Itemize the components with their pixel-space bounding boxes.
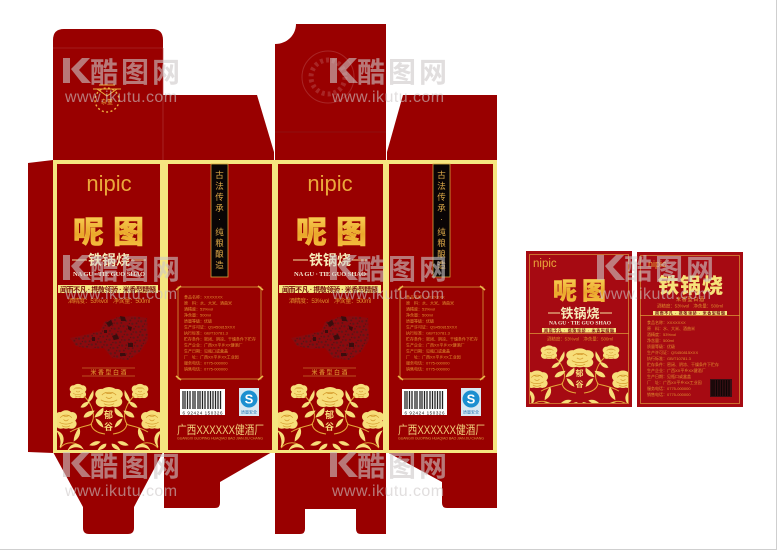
black strip: vertical slogan [211, 164, 228, 277]
info box: 生产日期：见瓶口或盒盖 [184, 348, 228, 354]
panel: back B [389, 164, 493, 450]
info box: 生产许可证：QS450815XXX [184, 324, 235, 330]
spec line: 酒精度：53%vol 净含量：500ml [547, 336, 613, 342]
factory name: 广西XXXXXX健酒厂 [398, 423, 485, 437]
black strip: vertical slogan: · [218, 214, 221, 224]
black strip: vertical slogan: 造 [437, 260, 446, 270]
factory name: 广西XXXXXX健酒厂 [177, 423, 264, 437]
black strip: vertical slogan: · [440, 214, 443, 224]
factory pinyin: GUANGXI GUOPING HUAQIAO BAO JIAN JIU CHANG [177, 436, 263, 440]
brand: nipic: nipic [307, 171, 353, 196]
info box: 食品名称：XXXXXXX [406, 294, 445, 300]
spec line: 酒精度：53%vol 净含量：500ml [289, 297, 371, 305]
black strip: vertical slogan: 纯 [215, 227, 224, 237]
black strip: vertical slogan: 纯 [437, 227, 446, 237]
barcode [402, 389, 447, 416]
watermark: row 2 right: www.ikutu.com [598, 286, 712, 303]
watermark: row 3 middle [330, 451, 447, 500]
black strip: vertical slogan: 酿 [215, 249, 224, 259]
watermark: row 2 left: www.ikutu.com [64, 286, 178, 303]
info box [398, 286, 485, 380]
info box: 销售电话：0775-000000 [184, 366, 228, 372]
watermark: row 1 middle [330, 57, 447, 106]
info box: 净含量：500ml [184, 312, 211, 318]
pinyin line: NA GU · TIE GUO SHAO [549, 320, 612, 326]
black strip: vertical slogan: 酿 [437, 249, 446, 259]
illustration: gold peonies [276, 384, 384, 450]
panel content: front A [55, 171, 163, 450]
info box: 生产日期：见瓶口或盒盖 [406, 348, 450, 354]
brand: nipic: nipic [86, 171, 132, 196]
info text: 生产许可证：QS450815XXX [647, 349, 698, 355]
black strip: vertical slogan: 粮 [437, 238, 446, 248]
brand: nipic: nipic [648, 259, 667, 269]
info box: 质量等级：优级 [184, 318, 212, 324]
black strip: vertical slogan: 承 [215, 203, 224, 213]
subtitle: 铁锅烧 [293, 252, 367, 266]
pinyin line: NA GU · TIE GUO SHAO [294, 271, 366, 278]
tag: 米香型白酒: 米香型白酒 [90, 368, 126, 376]
watermark: row 2 middle [330, 254, 447, 303]
heading: 呢图: 呢图 [296, 215, 367, 250]
info text: 酒精度：53%vol [647, 331, 676, 337]
tag: 米香型白酒 [303, 368, 356, 376]
emblem: lid seal [93, 85, 121, 112]
barcode: 6 92424 150326 [404, 410, 445, 416]
info box: 生产许可证：QS450815XXX [406, 324, 457, 330]
illustration: gold peonies: 谷 [325, 421, 334, 432]
box dieline [28, 24, 497, 534]
panel: back A [168, 164, 272, 450]
label: front [526, 251, 634, 408]
info box [176, 286, 263, 380]
strip: slogan: 闻而不凡 · 携敬领骄 · 米香型精髓 [655, 310, 725, 316]
barcode: 6 92424 150326 [182, 410, 223, 416]
pinyin line: NA GU · TIE GUO SHAO [73, 271, 145, 278]
tag: 米香型白酒: 米香型白酒 [312, 368, 348, 376]
flap: bottom third with notch [275, 452, 386, 534]
strip: slogan: 闻而不凡 · 携敬领骄 · 米香型精髓 [60, 285, 156, 294]
panel content: front B [276, 171, 384, 450]
watermark: row 3 left [63, 451, 180, 500]
watermark: row 2 right: 酷图网 [624, 254, 714, 285]
heading: 铁锅烧: 铁锅烧 [658, 275, 723, 298]
info text: 贮存条件：密闭、阴凉、干燥条件下贮存 [647, 361, 719, 367]
brand: nipic: nipic [533, 258, 557, 270]
panel: front A [57, 164, 160, 450]
info box: 厂 址：广西XX平乡XX工业园 [406, 354, 461, 360]
image: dark hotpot illustration [291, 316, 369, 360]
info box: 服务电话：0775-000000 [406, 360, 450, 366]
info text: 质量等级：优级 [647, 343, 675, 349]
QS mark [461, 388, 481, 416]
info box: 厂 址：广西XX平乡XX工业园 [184, 354, 239, 360]
heading: 呢图: 呢图 [73, 215, 144, 250]
black strip: vertical slogan [433, 164, 450, 277]
spec line: 酒精度：53%vol 净含量：500ml [657, 302, 723, 310]
panel content: back A [176, 164, 264, 440]
black strip: vertical slogan: 古 [215, 170, 224, 180]
QS mark: S [467, 392, 476, 406]
black strip: vertical slogan: 古 [437, 170, 446, 180]
barcode [180, 389, 225, 416]
flap: bottom fourth [387, 452, 497, 508]
info box: 贮存条件：密闭、阴凉、干燥条件下贮存 [406, 336, 478, 342]
illustration: gold peonies: 郁 [104, 409, 113, 420]
black strip: vertical slogan: 传 [215, 192, 224, 202]
black strip: vertical slogan: 粮 [215, 238, 224, 248]
QS mark: 质量安全 [463, 408, 479, 414]
info text [647, 319, 719, 397]
label: back [637, 252, 743, 407]
info box: 食品名称：XXXXXXX [184, 294, 223, 300]
emblem: lid seal: 杂董 [101, 98, 113, 106]
emblem: faint ring on flap [302, 51, 354, 103]
flap: top left lid [53, 29, 163, 160]
subtitle: 铁锅烧: 铁锅烧 [88, 252, 130, 268]
watermark: row 3 left: www.ikutu.com [64, 483, 178, 500]
strip: slogan [58, 285, 158, 293]
info box: 净含量：500ml [406, 312, 433, 318]
flap: bottom second [164, 452, 272, 508]
flap: top fourth [387, 95, 497, 160]
QS mark [239, 388, 259, 416]
illustration: gold peonies: 郁 [576, 368, 584, 378]
black strip: vertical slogan: 法 [437, 181, 446, 191]
strip: slogan: 闻而不凡 · 携敬领骄 · 米香型精髓 [282, 285, 378, 294]
subtitle: 铁锅烧: 铁锅烧 [560, 306, 600, 321]
info box: 执行标准：GB/T10781.3 [406, 330, 451, 336]
flap: top third with notch [275, 24, 386, 160]
panel: front B [278, 164, 383, 450]
watermark: row 2 middle: 酷图网 [357, 254, 447, 285]
barcode [710, 379, 732, 397]
flap: left side glue tab [28, 160, 53, 453]
watermark: row 1 left: 酷图网 [90, 57, 180, 88]
black strip: vertical slogan: 法 [215, 181, 224, 191]
watermark: row 1 middle: 酷图网 [357, 57, 447, 88]
tag: 米香型白酒 [82, 368, 135, 376]
watermark: row 1 left [63, 57, 180, 106]
info box: 销售电话：0775-000000 [406, 366, 450, 372]
flap: bottom first [53, 452, 163, 534]
black strip: vertical slogan: 造 [215, 260, 224, 270]
info box: 贮存条件：密闭、阴凉、干燥条件下贮存 [184, 336, 256, 342]
info box: 原 料：水、大米、酒曲米 [406, 300, 454, 306]
info text: 厂 址：广西XX平乡XX工业园 [647, 379, 702, 385]
strip: slogan [279, 285, 381, 293]
info text: 销售电话：0775-000000 [647, 391, 691, 397]
QS mark: S [245, 392, 254, 406]
black strip: vertical slogan: 承 [437, 203, 446, 213]
strip: slogan: 闻而不凡 · 携敬领骄 · 米香型精髓 [544, 327, 614, 333]
info text: 服务电话：0775-000000 [647, 385, 691, 391]
watermark: row 3 middle: 酷图网 [357, 451, 447, 482]
flap: top second [163, 95, 274, 160]
subtitle: 铁锅烧 [72, 252, 146, 266]
watermark: row 3 middle: www.ikutu.com [331, 483, 445, 500]
watermark: row 1 left: www.ikutu.com [64, 89, 178, 106]
info box: 执行标准：GB/T10781.3 [184, 330, 229, 336]
illustration: gold peonies: 郁 [325, 409, 334, 420]
illustration: gold peonies [55, 384, 163, 450]
illustration: gold peonies: 谷 [104, 421, 113, 432]
info text: 执行标准：GB/T10781.3 [647, 355, 692, 361]
heading: 呢图: 呢图 [553, 278, 606, 305]
spec line: 酒精度：53%vol 净含量：500ml [68, 297, 150, 305]
yellow frame [53, 160, 497, 453]
info text: 生产日期：见瓶口或盒盖 [647, 373, 691, 379]
info box: 生产企业：广西XX平乡XX健酒厂 [406, 342, 465, 348]
info text: 净含量：500ml [647, 337, 674, 343]
image: dark hotpot illustration [70, 316, 148, 360]
QS mark: 质量安全 [241, 408, 257, 414]
watermark: row 1 middle: www.ikutu.com [331, 89, 445, 106]
watermark: row 2 left [63, 254, 180, 303]
illustration: gold peonies [530, 345, 628, 403]
info box: 原 料：水、大米、酒曲米 [184, 300, 232, 306]
info text: 食品名称：XXXXXXX [647, 319, 686, 325]
black strip: vertical slogan: 传 [437, 192, 446, 202]
watermark: row 2 middle: www.ikutu.com [331, 286, 445, 303]
watermark: row 2 right [597, 254, 714, 303]
info box: 酒精度：53%vol [184, 306, 213, 312]
info box: 生产企业：广西XX平乡XX健酒厂 [184, 342, 243, 348]
info text: 生产企业：广西XX平乡XX健酒厂 [647, 367, 706, 373]
tag: 米香型白酒: 米香型白酒 [676, 296, 704, 303]
panel content: back B [398, 164, 485, 440]
info box: 酒精度：53%vol [406, 306, 435, 312]
watermark: row 2 left: 酷图网 [90, 254, 180, 285]
illustration: gold peonies: 谷 [576, 379, 584, 389]
factory pinyin: GUANGXI GUOPING HUAQIAO BAO JIAN JIU CHANG [398, 436, 484, 440]
subtitle: 铁锅烧: 铁锅烧 [309, 252, 351, 268]
subtitle: 铁锅烧 [548, 306, 612, 321]
watermark: row 3 left: 酷图网 [90, 451, 180, 482]
info box: 质量等级：优级 [406, 318, 434, 324]
info box: 服务电话：0775-000000 [184, 360, 228, 366]
info text: 原 料：水、大米、酒曲米 [647, 325, 695, 331]
